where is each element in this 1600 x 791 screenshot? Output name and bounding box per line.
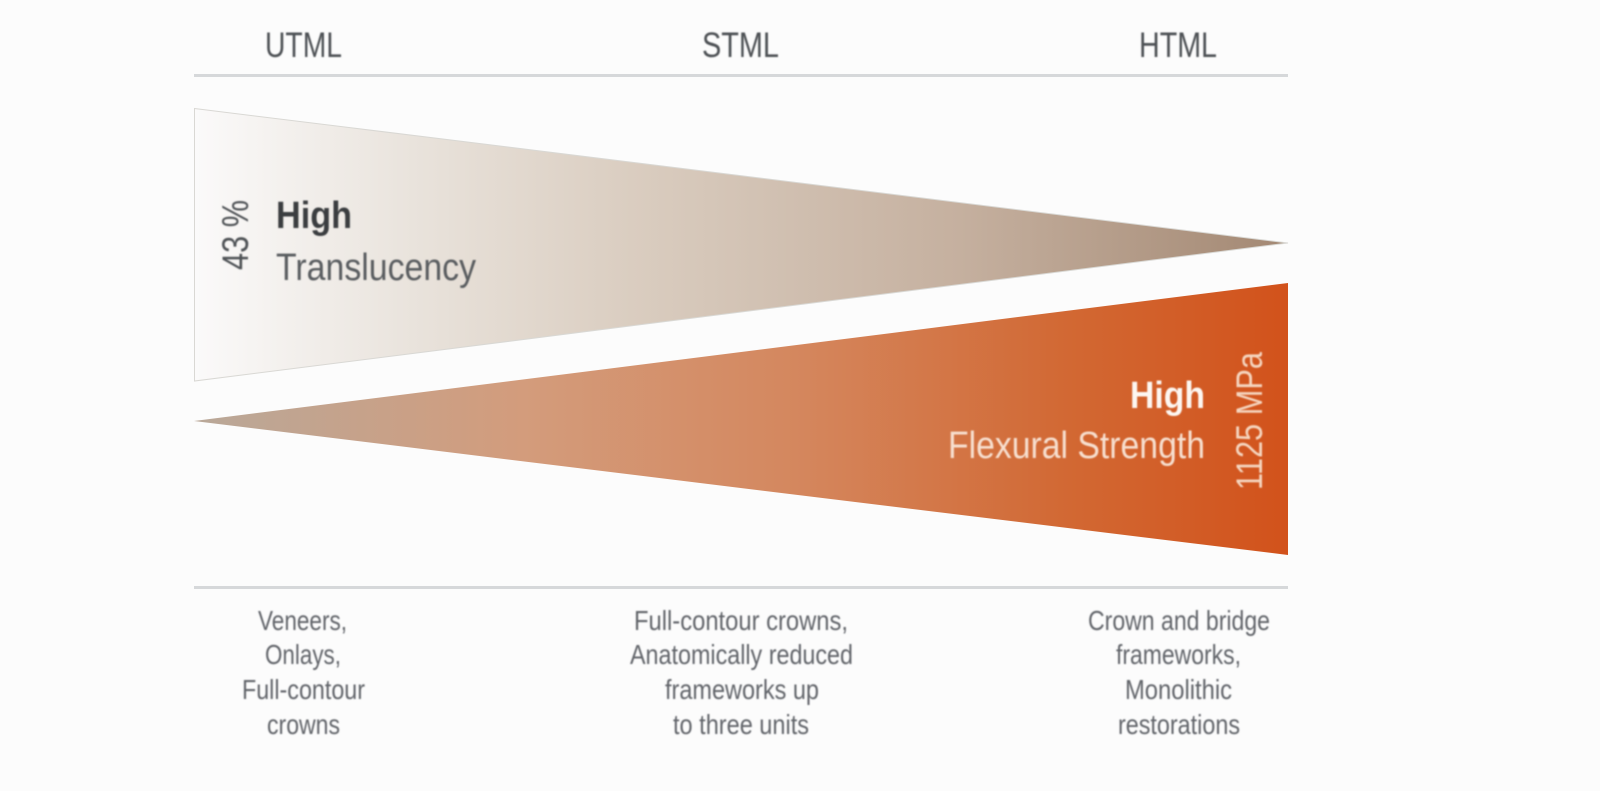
uses: STML	[630, 605, 853, 740]
label: Translucency: Translucency	[276, 247, 476, 289]
header row	[265, 26, 1217, 65]
uses: HTML	[1088, 605, 1270, 740]
uses: UTML: Full-contour	[242, 674, 365, 705]
uses: UTML: crowns	[267, 709, 340, 740]
uses: HTML: frameworks,	[1116, 639, 1241, 670]
uses: STML: Full-contour crowns,	[634, 605, 848, 636]
heading: STML: STML	[702, 26, 779, 65]
uses: STML: Anatomically reduced	[630, 639, 853, 670]
label: High: High	[276, 195, 352, 237]
uses: UTML: Veneers,	[258, 605, 347, 636]
label: 43 %: 43 %	[215, 200, 256, 270]
uses: UTML	[242, 605, 365, 740]
top divider	[194, 74, 1288, 77]
heading: UTML: UTML	[265, 26, 342, 65]
uses: HTML: Monolithic	[1125, 674, 1232, 705]
label: Flexural Strength: Flexural Strength	[948, 425, 1205, 467]
label: High: High	[1130, 375, 1205, 417]
bottom divider	[194, 586, 1288, 589]
wedge: translucency	[194, 108, 1288, 381]
uses: HTML: Crown and bridge	[1088, 605, 1270, 636]
uses: STML: frameworks up	[665, 674, 819, 705]
heading: HTML: HTML	[1139, 26, 1217, 65]
uses: HTML: restorations	[1118, 709, 1240, 740]
uses: STML: to three units	[673, 709, 809, 740]
wedge: flexural strength	[194, 283, 1288, 555]
uses: UTML: Onlays,	[265, 639, 341, 670]
label: 1125 MPa: 1125 MPa	[1229, 352, 1270, 490]
